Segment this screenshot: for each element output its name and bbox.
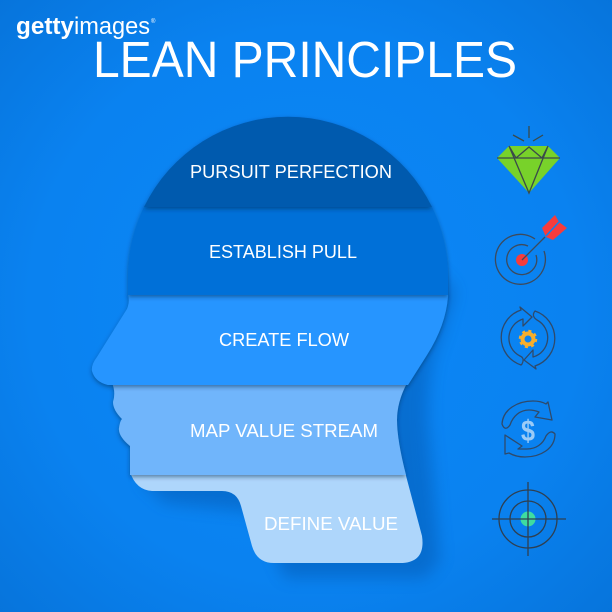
dollar sign: $ (521, 415, 535, 448)
band: map value stream (112, 383, 407, 475)
icon: cycle with gear (501, 307, 555, 369)
gear (520, 331, 536, 347)
band: establish pull (128, 205, 448, 295)
band: create flow (92, 294, 448, 385)
band: establish pull: ESTABLISH PULL (209, 241, 357, 262)
band: pursuit perfection (144, 117, 432, 207)
title: LEAN PRINCIPLES (93, 31, 517, 88)
watermark logo: images (74, 13, 150, 40)
head diagram (92, 117, 448, 563)
band: pursuit perfection: PURSUIT PERFECTION (190, 161, 392, 182)
band: define value (130, 472, 423, 563)
band: create flow: CREATE FLOW (219, 329, 350, 350)
icon: target with arrow (495, 215, 567, 284)
watermark logo: ® (151, 18, 156, 25)
head shadow (140, 130, 455, 578)
icon: diamond (497, 126, 560, 193)
band: map value stream: MAP VALUE STREAM (190, 420, 378, 441)
icon: crosshair (492, 482, 566, 556)
icon: cycle with dollar (502, 401, 555, 457)
watermark logo: getty (16, 13, 75, 40)
band: define value: DEFINE VALUE (264, 513, 398, 534)
watermark logo (16, 13, 156, 40)
